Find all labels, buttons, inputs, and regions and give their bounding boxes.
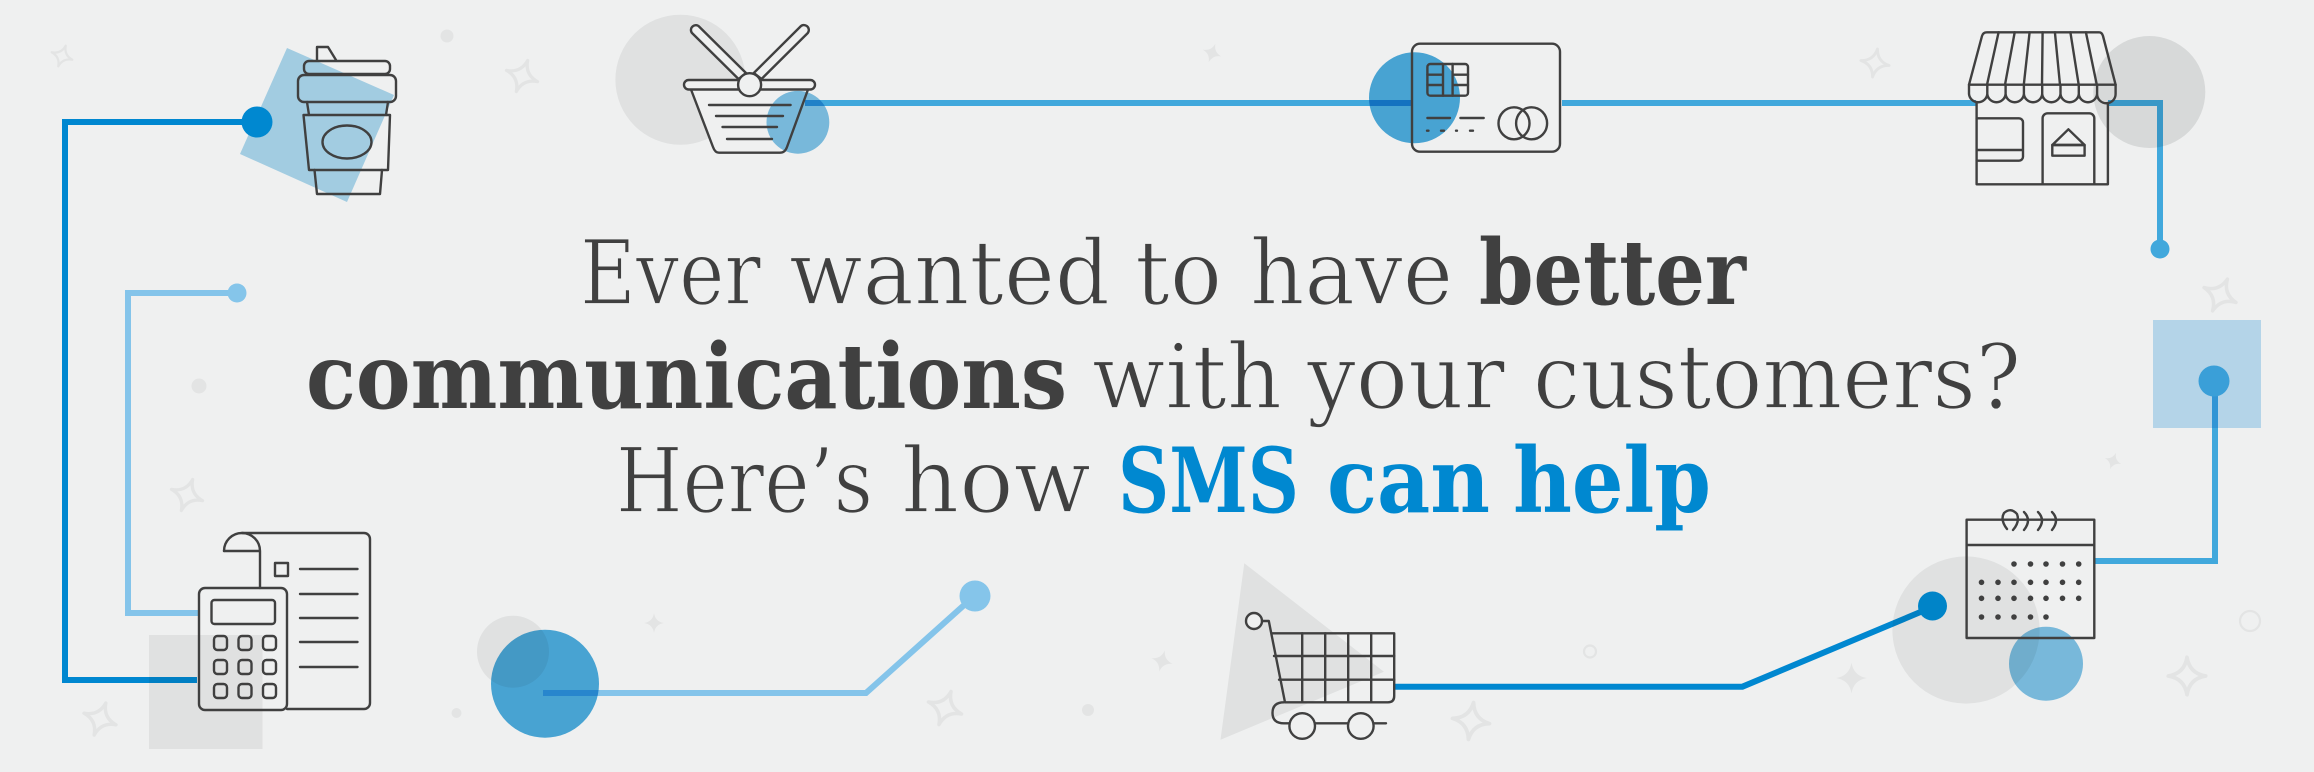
headline: with [1092, 325, 1282, 430]
headline: SMS [1118, 428, 1299, 534]
connector: dot to calculator [128, 284, 246, 613]
icon: shopping basket [684, 25, 829, 154]
connector: basket, card and store [805, 103, 2170, 258]
headline: Ever [580, 221, 762, 326]
connector: cup to calculator [65, 106, 272, 680]
headline: wanted [789, 221, 1110, 326]
headline: customers? [1533, 325, 2021, 430]
headline: can [1327, 428, 1490, 534]
connector: bottom bubble to dot [543, 580, 990, 693]
headline: help [1513, 428, 1711, 534]
icon: credit card [1412, 44, 1560, 152]
headline: have [1250, 221, 1453, 326]
headline: your [1306, 325, 1506, 430]
headline: communications [306, 324, 1067, 430]
icon: shopping cart [1246, 613, 1394, 739]
icon: calculator and receipt [199, 533, 370, 710]
icon: store front [1969, 32, 2116, 184]
icon: coffee cup [298, 47, 396, 194]
connector: calendar to square dot [2095, 366, 2230, 561]
headline: to [1135, 221, 1222, 326]
headline: Here’s [616, 429, 873, 534]
icon: calendar [1967, 510, 2094, 638]
connector: cart to calendar [1395, 592, 1947, 687]
headline [306, 220, 2021, 534]
headline: how [901, 429, 1091, 534]
headline: better [1479, 220, 1747, 326]
